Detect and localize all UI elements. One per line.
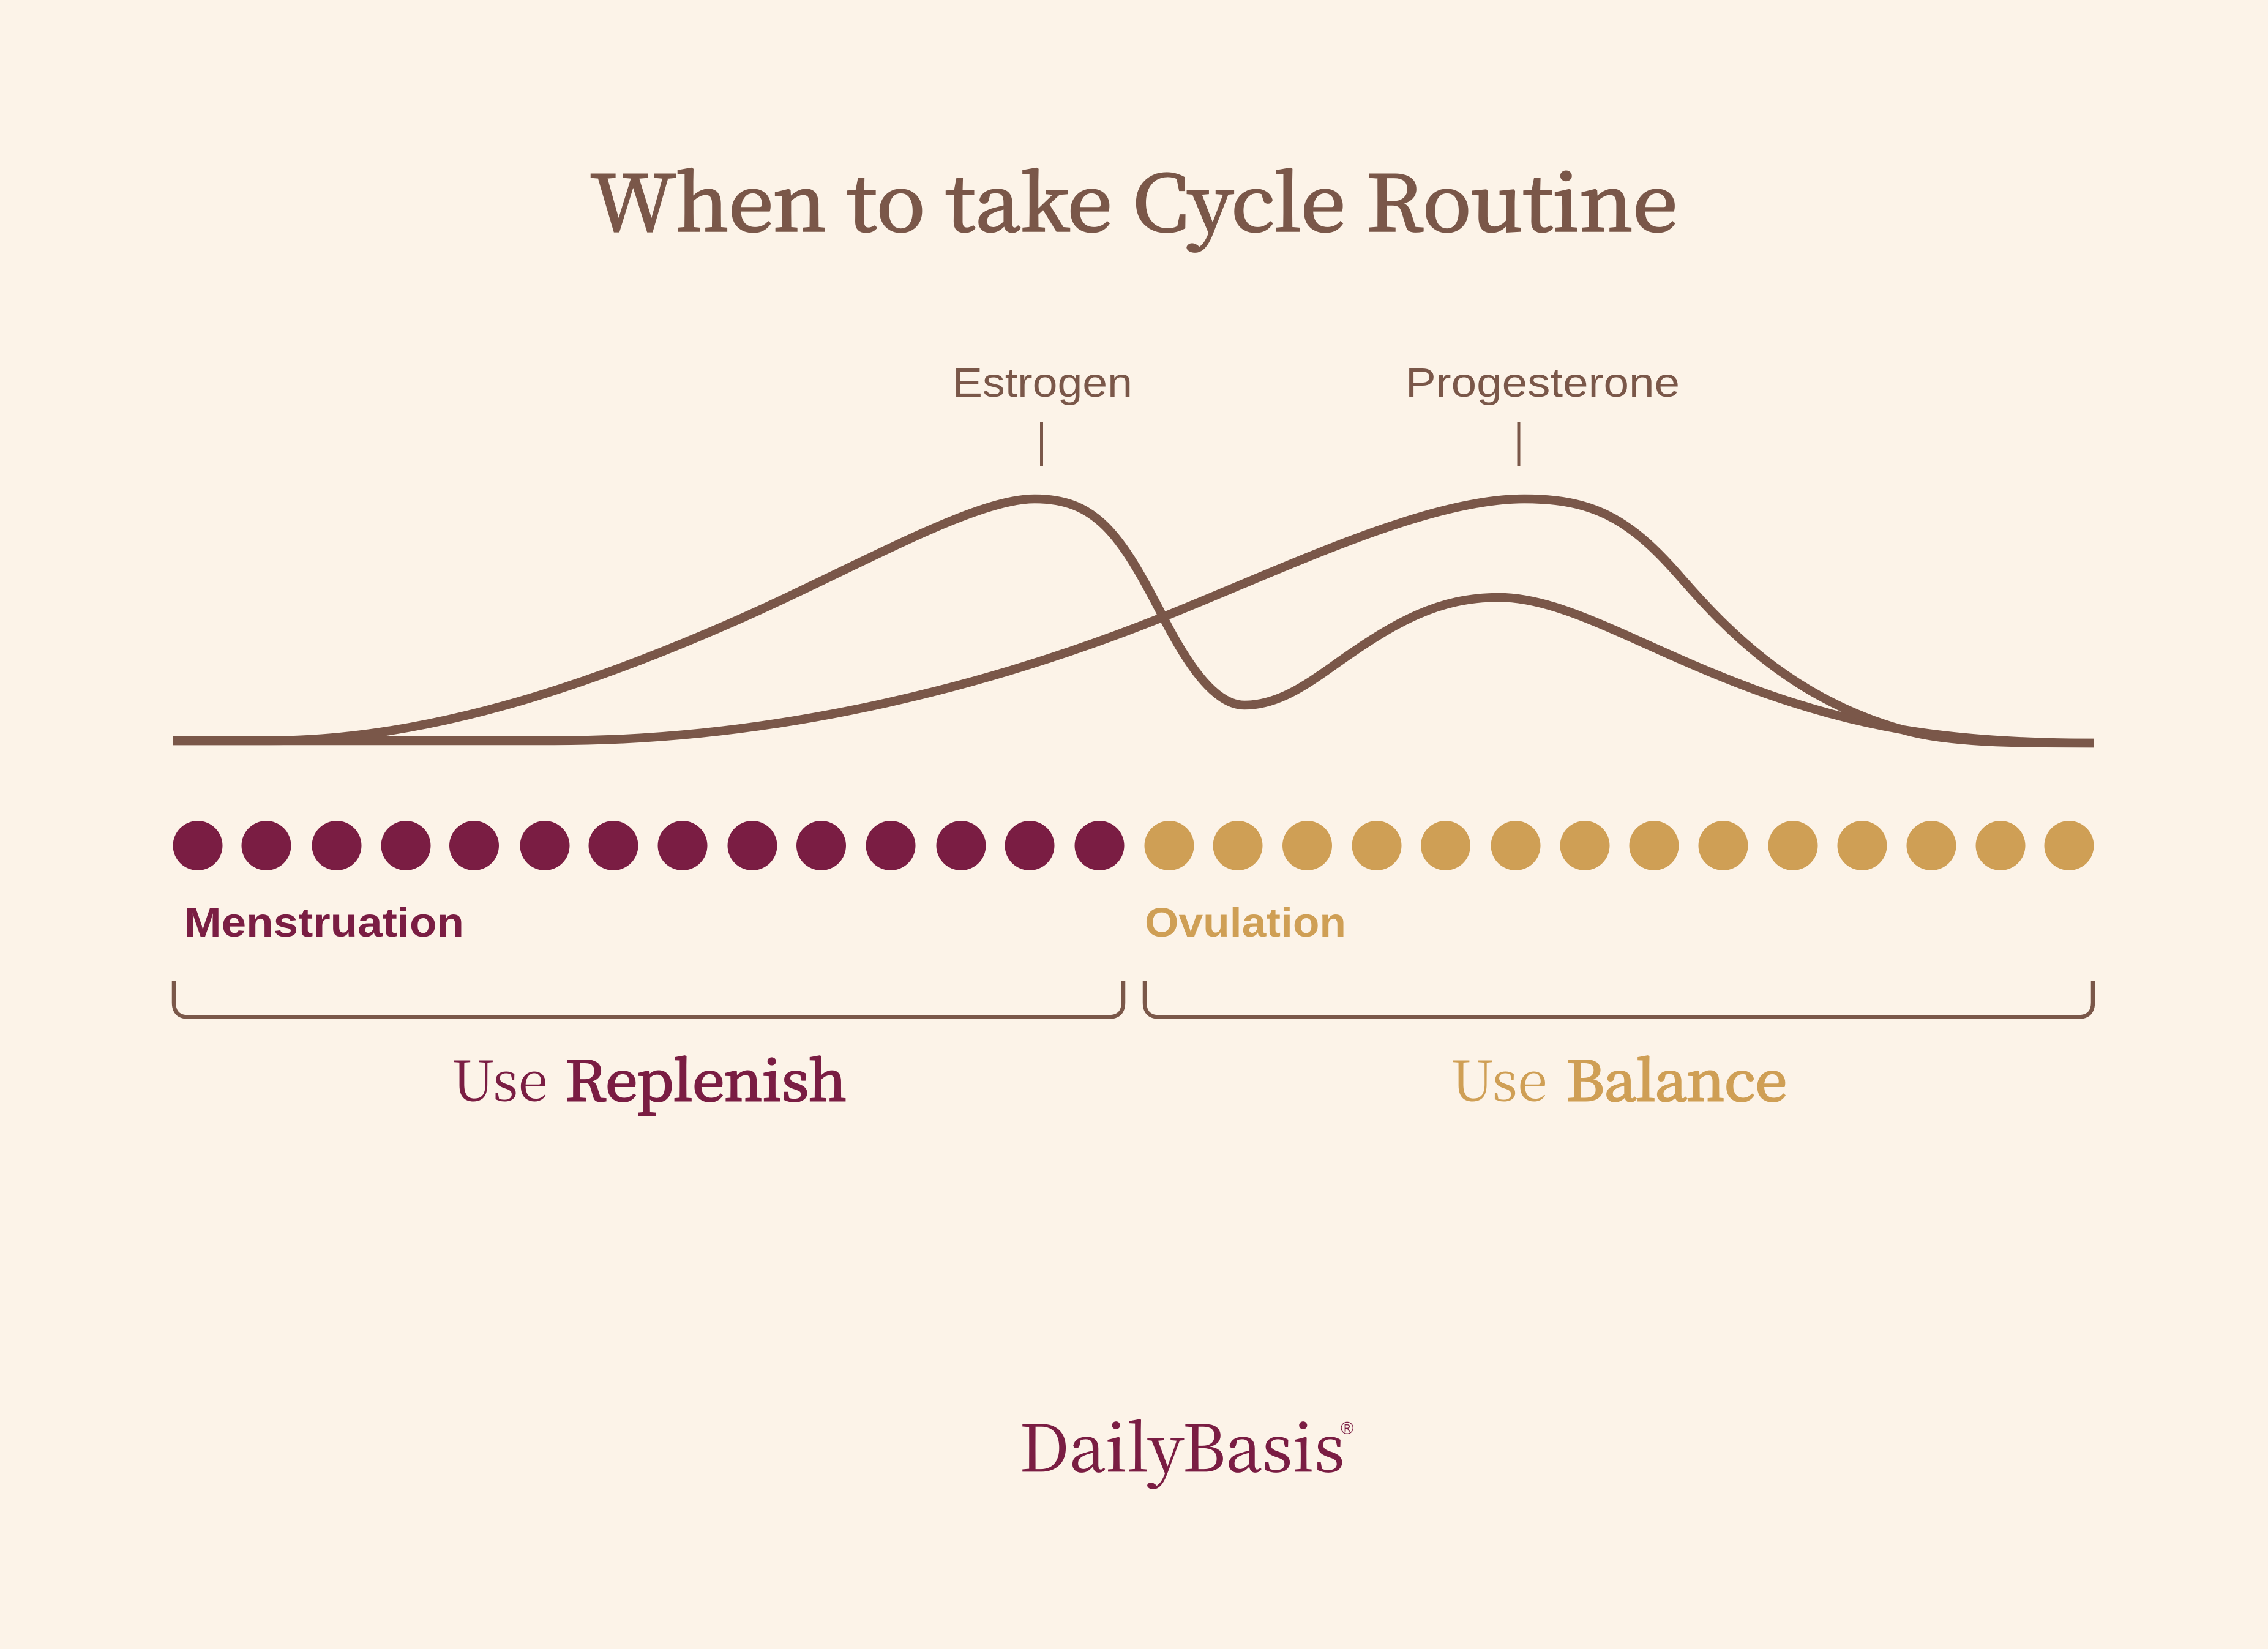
bracket: menstruation span	[174, 981, 1123, 1017]
label text: Progesterone	[1405, 360, 1680, 406]
label: Estrogen	[952, 360, 1132, 466]
word: Balance: Balance	[1566, 1037, 1787, 1116]
phase label: Ovulation: Ovulation	[1145, 900, 1346, 946]
bracket: ovulation span	[1145, 981, 2093, 1017]
dots: menstruation phase days	[173, 821, 1124, 870]
recommendation: Use Replenish	[452, 1037, 847, 1116]
wordmark: DailyBasis	[1019, 1397, 1345, 1490]
tick line	[1040, 422, 1043, 466]
recommendation: Use Balance	[1451, 1037, 1787, 1116]
title: When to take Cycle Routine	[591, 143, 1677, 253]
tick line	[1517, 422, 1521, 466]
phase label: Menstruation: Menstruation	[184, 900, 464, 946]
word: Use: Use	[452, 1037, 548, 1116]
word: Replenish: Replenish	[565, 1037, 847, 1116]
curve: estrogen	[173, 499, 2094, 743]
curve: progesterone	[173, 499, 2094, 743]
label: Progesterone	[1405, 360, 1680, 466]
label text: Estrogen	[952, 360, 1132, 406]
chart: hormone curves	[173, 499, 2094, 743]
logo: DailyBasis	[1019, 1397, 1353, 1490]
dots: ovulation phase days	[1145, 821, 2094, 870]
word: Use: Use	[1451, 1037, 1548, 1116]
registered mark: ®	[1341, 1419, 1353, 1438]
